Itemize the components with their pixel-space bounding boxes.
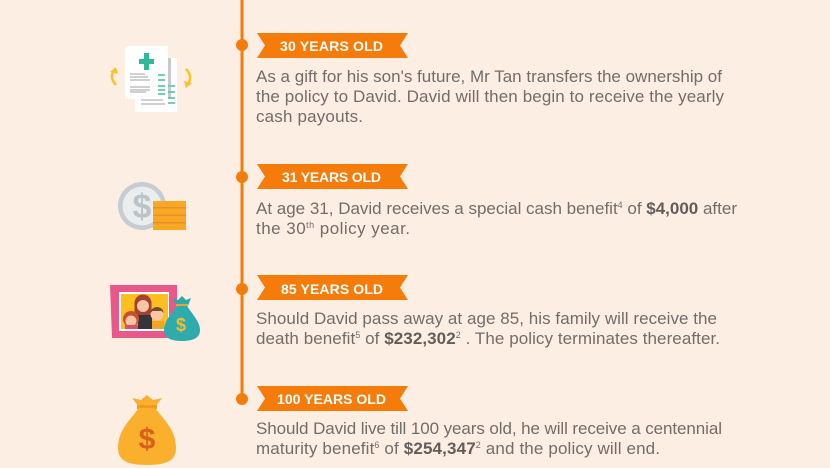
icon: coin and stack: $ <box>133 188 152 226</box>
text: 100 years old description: 2 <box>476 440 481 450</box>
text: 30 years old description: As a gift for his son's future, Mr Tan transfers the ownership of <box>256 67 722 86</box>
text: 85 years old description: $232,302 <box>384 329 456 348</box>
text: 30 years old description: the policy to David. David will then begin to receive the yearly <box>256 87 724 106</box>
text: 31 years old description: At age 31, David receives a special cash benefit <box>256 199 618 218</box>
icon: coin and stack <box>118 182 186 230</box>
milestone: 31 years old <box>236 164 408 189</box>
milestone: 30 years old: 30 YEARS OLD <box>280 38 383 54</box>
icon: large money bag <box>118 395 176 465</box>
text: 31 years old description: of <box>623 199 646 218</box>
milestone: 100 years old: 100 YEARS OLD <box>277 391 386 407</box>
text: 100 years old description <box>256 419 722 458</box>
text: 85 years old description: of <box>360 329 384 348</box>
milestone: 85 years old <box>236 275 408 300</box>
text: 31 years old description <box>256 199 737 238</box>
text: 100 years old description: $254,347 <box>404 439 476 458</box>
text: 85 years old description: death benefit <box>256 329 355 348</box>
text: 100 years old description: of <box>380 439 404 458</box>
text: 31 years old description: the 30 <box>256 219 306 238</box>
text: 85 years old description: . The policy terminates thereafter. <box>461 329 720 348</box>
text: 85 years old description: 5 <box>355 330 360 340</box>
text: 100 years old description: maturity benefit <box>256 439 374 458</box>
text: 31 years old description: policy year. <box>315 219 410 238</box>
icon: family photo and money bag <box>110 285 200 341</box>
milestone: 85 years old: 85 YEARS OLD <box>281 281 383 297</box>
text: 85 years old description <box>256 309 720 348</box>
milestone: 30 years old <box>236 33 408 58</box>
icon: family photo and money bag: $ <box>176 315 186 335</box>
text: 30 years old description: cash payouts. <box>256 107 363 126</box>
icon: large money bag: $ <box>139 423 156 456</box>
text: 100 years old description: and the policy will end. <box>481 439 660 458</box>
text: 100 years old description: Should David live till 100 years old, he will receive a centennial <box>256 419 722 438</box>
text: 85 years old description: 2 <box>456 330 461 340</box>
text: 31 years old description: th <box>306 220 314 230</box>
milestone: 100 years old <box>236 386 408 411</box>
text: 85 years old description: Should David pass away at age 85, his family will receive the <box>256 309 717 328</box>
icon: documents with arrows <box>110 46 192 112</box>
text: 100 years old description: 6 <box>374 440 379 450</box>
text: 30 years old description <box>256 67 724 126</box>
text: 31 years old description: $4,000 after <box>646 199 737 218</box>
text: 31 years old description: 4 <box>618 200 623 210</box>
milestone: 31 years old: 31 YEARS OLD <box>282 169 381 185</box>
timeline line <box>240 0 244 399</box>
